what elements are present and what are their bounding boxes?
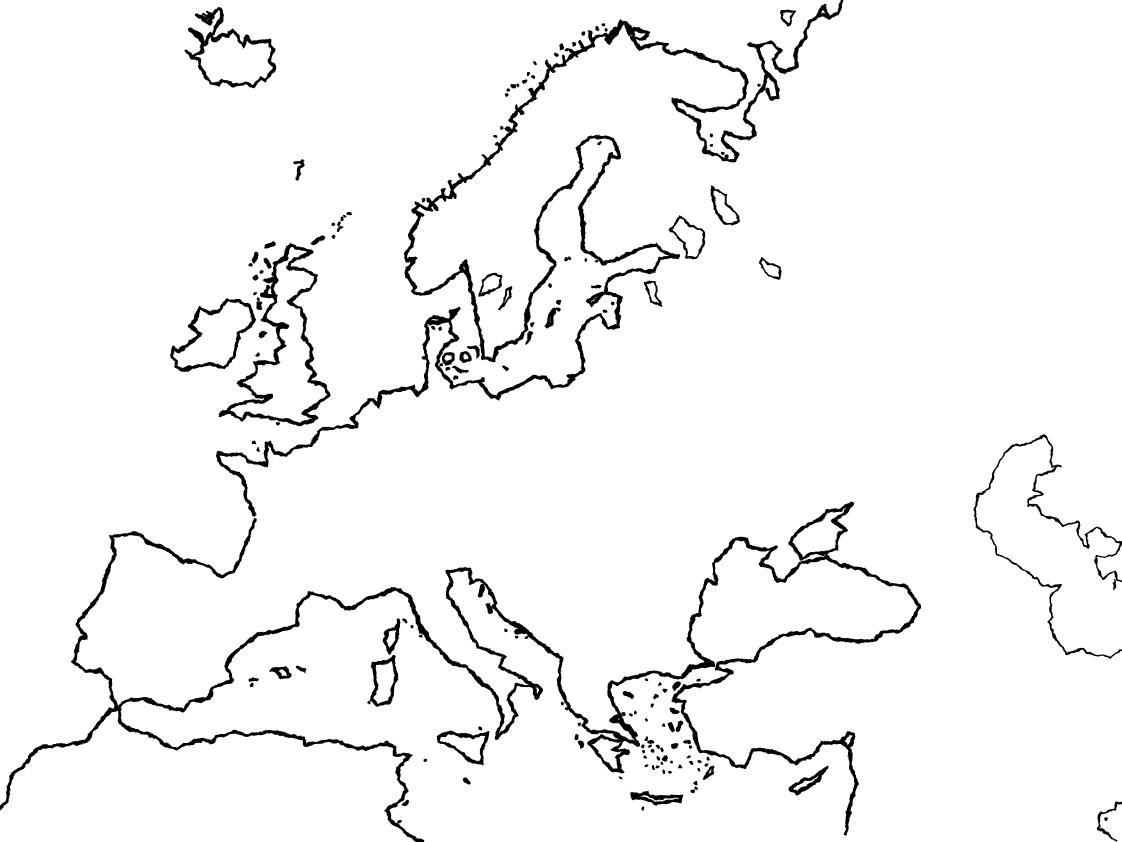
Iberia and North Africa coast <box>0 520 430 842</box>
island: Iceland, Faroe and Shetland group <box>186 8 349 237</box>
Sweden Baltic coast and Finland <box>465 137 678 320</box>
link: Brittany to Biscay coast <box>218 453 255 515</box>
peninsula: Scandinavia, Finland and Kola <box>405 0 842 320</box>
Caspian Sea <box>975 436 1122 842</box>
islands: Great Britain and Ireland <box>172 237 427 465</box>
Norway fjord teeth <box>413 23 633 215</box>
coast of Denmark, Germany and Baltic states <box>400 270 620 398</box>
Italy, Balkans and Greece <box>380 568 713 808</box>
Black Sea, Turkey and Levant coast <box>673 503 919 833</box>
coast of France, Low Countries and Germany <box>218 387 427 465</box>
